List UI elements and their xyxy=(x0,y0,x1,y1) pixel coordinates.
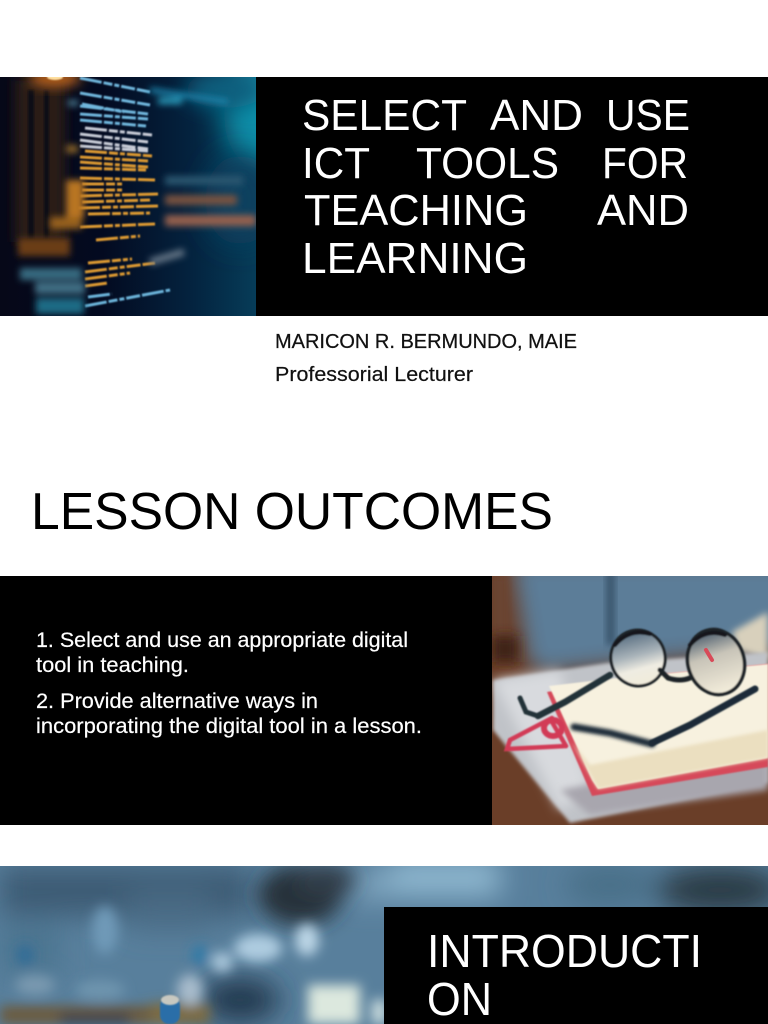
outcomes list: tool in teaching. xyxy=(36,654,189,677)
photo: blurred classroom xyxy=(0,860,768,1024)
heading: lesson outcomes: LESSON OUTCOMES xyxy=(31,483,553,541)
title text: TOOLS xyxy=(416,139,559,188)
glasses xyxy=(520,622,755,743)
title text: AND xyxy=(597,186,689,235)
photo: blurred code on screen xyxy=(0,77,256,316)
title text: AND xyxy=(490,91,583,140)
title text: SELECT xyxy=(302,91,467,140)
panel: introduction xyxy=(384,907,768,1024)
title text: ICT xyxy=(302,139,370,188)
title banner xyxy=(256,77,768,316)
title text: USE xyxy=(606,91,690,140)
title text: TEACHING xyxy=(304,186,528,235)
introduction heading: INTRODUCTI xyxy=(427,925,702,977)
introduction heading xyxy=(427,925,702,1024)
introduction heading: ON xyxy=(427,973,492,1024)
outcomes list: incorporating the digital tool in a lesson. xyxy=(36,715,422,738)
panel: lesson outcomes xyxy=(0,576,493,825)
title text xyxy=(302,91,690,283)
photo: glasses on notebook xyxy=(492,560,768,825)
presenter name: MARICON R. BERMUNDO, MAIE xyxy=(275,331,577,353)
outcomes list: 1. Select and use an appropriate digital xyxy=(36,629,408,652)
outcomes list xyxy=(36,629,422,738)
presenter role: Professorial Lecturer xyxy=(275,364,473,386)
outcomes list: 2. Provide alternative ways in xyxy=(36,690,318,713)
title text: LEARNING xyxy=(302,234,528,283)
red ribbon xyxy=(507,718,566,749)
title text: FOR xyxy=(602,139,688,188)
